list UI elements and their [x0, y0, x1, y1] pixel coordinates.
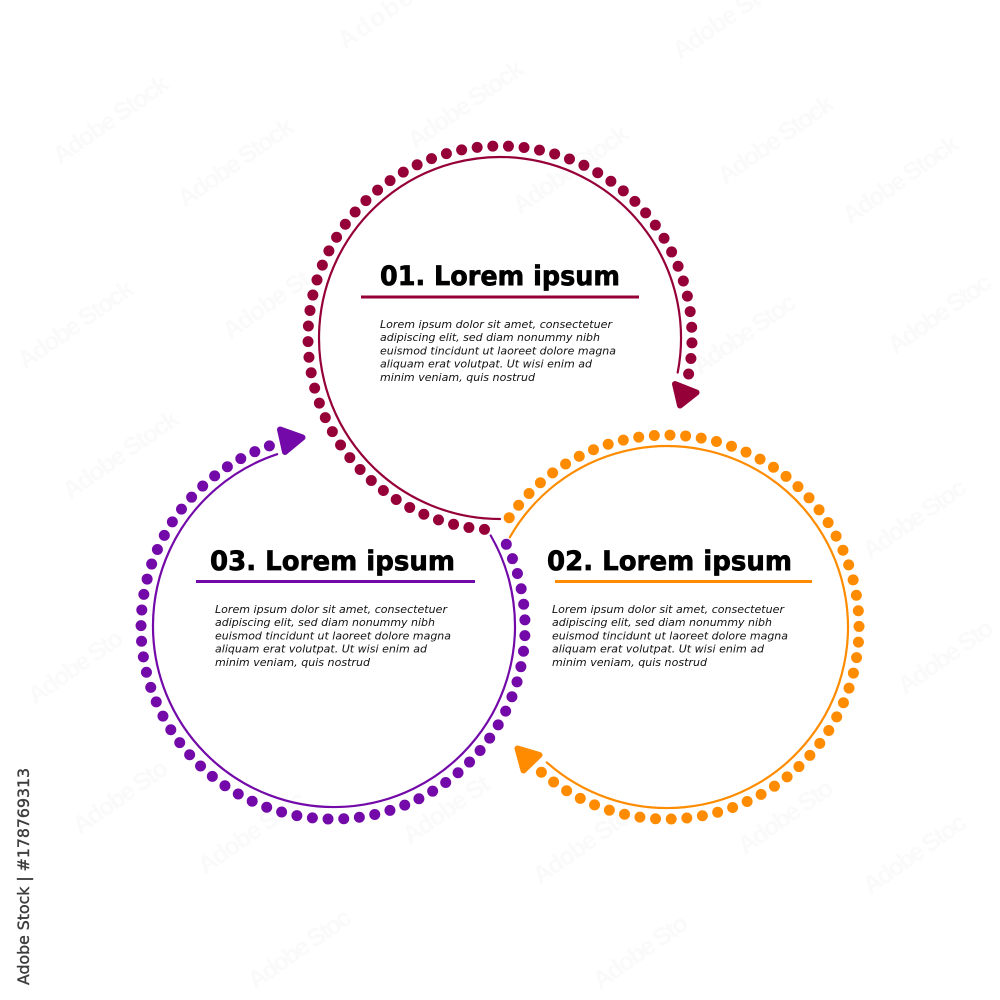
orange dotted ring — [509, 435, 859, 819]
text block: 02: aliquam erat volutpat. Ut wisi enim ad — [552, 642, 765, 656]
text block: 02: minim veniam, quis nostrud — [552, 656, 708, 669]
text block: 03: aliquam erat volutpat. Ut wisi enim ad — [215, 642, 428, 656]
panel: step 02 orange circle — [509, 435, 859, 819]
watermark pattern: Adobe Stoc — [882, 268, 997, 360]
heading rule: 01 — [361, 296, 639, 298]
watermark pattern: Adobe St — [397, 769, 496, 850]
panel: step 03 purple circle — [141, 430, 525, 819]
arrow: orange — [518, 748, 540, 770]
text block: 02: euismod tincidunt ut laoreet dolore magna — [552, 630, 788, 642]
watermark pattern: Adobe Stock — [712, 89, 839, 190]
watermark pattern: Adobe Stock — [837, 129, 964, 230]
watermark pattern: Adobe Sto — [22, 624, 129, 710]
watermark pattern: Adobe Stock — [12, 274, 139, 375]
watermark pattern: Adobe Stock — [507, 119, 634, 220]
stock credit label: Adobe Stock | #178769313 — [14, 768, 33, 985]
text block: 01 — [380, 318, 616, 384]
watermark pattern: Adobe Stoc — [687, 288, 802, 380]
text block: 01: aliquam erat volutpat. Ut wisi enim ad — [380, 358, 593, 370]
watermark pattern: Adobe Stock — [57, 404, 184, 505]
watermark pattern: Adobe Stock — [172, 112, 299, 213]
text block: 01: euismod tincidunt ut laoreet dolore magna — [380, 344, 616, 358]
purple dotted ring — [141, 446, 525, 819]
text block: 03: Lorem ipsum dolor sit amet, consectetuer — [215, 603, 448, 616]
heading: 01: 01. Lorem ipsum — [380, 261, 620, 292]
heading rule: 02 — [555, 580, 812, 583]
text block: 03: minim veniam, quis nostrud — [215, 656, 371, 669]
orange inner arc — [510, 446, 848, 808]
heading: 03: 03. Lorem ipsum — [210, 546, 455, 577]
watermark pattern: Adobe Sto — [587, 909, 694, 995]
watermark pattern: Adobe Sto — [892, 614, 999, 700]
watermark pattern: Adobe Stoc — [527, 795, 646, 890]
text block: 03: adipiscing elit, sed diam nonummy nibh — [215, 616, 435, 629]
text block: 01: Lorem ipsum dolor sit amet, consectetuer — [380, 318, 613, 331]
watermark pattern: Adobe Stoc — [857, 473, 972, 565]
maroon inner arc — [319, 157, 681, 519]
heading rule: 03 — [196, 580, 475, 583]
watermark pattern: Adobe Sto — [732, 774, 839, 860]
text block: 01: minim veniam, quis nostrud — [380, 371, 536, 384]
maroon dotted ring — [308, 146, 692, 530]
watermark pattern: Adobe Sto — [67, 754, 174, 840]
heading: 02: 02. Lorem ipsum — [547, 546, 792, 577]
panel: step 01 maroon circle — [308, 146, 696, 530]
watermark pattern: Adobe Stoc — [242, 903, 357, 995]
watermark pattern: Adobe Stoc — [192, 785, 311, 880]
arrow: purple — [280, 430, 302, 452]
text block: 03: euismod tincidunt ut laoreet dolore magna — [215, 630, 451, 642]
arrow: maroon — [675, 384, 696, 406]
watermark pattern: Adobe Stoc — [857, 808, 972, 900]
text block: 02: Lorem ipsum dolor sit amet, consectetuer — [552, 603, 785, 616]
text block: 02: adipiscing elit, sed diam nonummy nibh — [552, 616, 772, 629]
text block: 03 — [215, 603, 451, 669]
purple inner arc — [153, 454, 515, 807]
text block: 02 — [552, 603, 788, 669]
watermark pattern: Adobe Stock — [47, 69, 174, 170]
watermark pattern: Adobe St — [217, 264, 316, 345]
watermark pattern: Adobe Stock — [402, 54, 529, 155]
text block: 01: adipiscing elit, sed diam nonummy nibh — [380, 331, 600, 344]
